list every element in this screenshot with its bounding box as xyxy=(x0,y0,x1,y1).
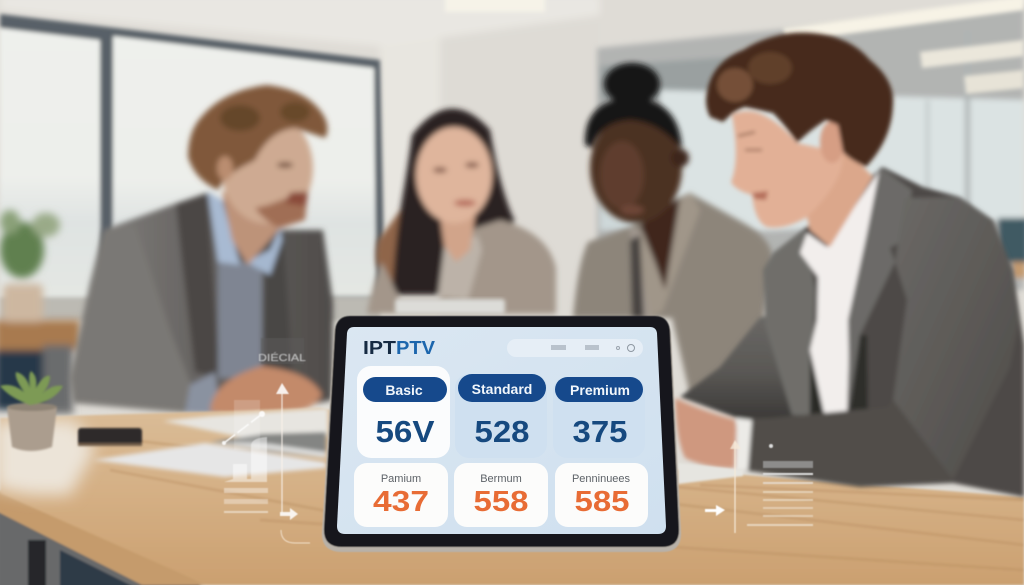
tablet body xyxy=(322,316,681,552)
table lines xyxy=(747,444,813,526)
price card 3 xyxy=(555,463,648,527)
column: standard xyxy=(455,374,547,458)
column: standard: 528 xyxy=(474,414,530,449)
person: woman with bun xyxy=(573,63,772,395)
price card 3: 585 xyxy=(574,486,630,518)
person: man on the left xyxy=(70,85,333,418)
logo xyxy=(363,338,435,358)
right windows xyxy=(597,5,1024,290)
badge xyxy=(258,338,307,364)
small tablet held behind xyxy=(395,299,505,314)
ceiling lights xyxy=(445,0,1024,94)
logo: IPT xyxy=(363,338,396,358)
price card 1 xyxy=(354,463,448,527)
overlay: left data graphic xyxy=(222,338,310,543)
price card 2: Bermum xyxy=(480,473,522,485)
white paper under right hand xyxy=(678,463,743,484)
column: premium xyxy=(553,377,645,458)
column: basic: Basic xyxy=(385,382,423,398)
overlay: right data graphic xyxy=(705,440,813,533)
table light reflection xyxy=(0,420,95,495)
phone on table xyxy=(78,428,142,446)
vertical arrow xyxy=(276,383,310,543)
price card 2 xyxy=(454,463,548,527)
column: standard: Standard xyxy=(472,381,532,397)
column: premium: 375 xyxy=(572,414,628,449)
price card 1: Pamium xyxy=(381,473,421,485)
tablet screen xyxy=(337,327,666,534)
table top xyxy=(0,408,1024,585)
bar chart and trend xyxy=(222,400,268,513)
top search bar xyxy=(507,339,643,357)
badge: DIÉCIAL xyxy=(258,351,307,364)
potted plant on table xyxy=(0,371,63,451)
person: man on the right xyxy=(675,33,1024,497)
column: basic: 56V xyxy=(376,414,435,449)
column: basic xyxy=(357,366,450,458)
person: woman at centre xyxy=(367,109,556,314)
column: premium: Premium xyxy=(570,382,630,398)
left windows xyxy=(0,14,385,321)
price card 2: 558 xyxy=(474,486,528,518)
tablet xyxy=(322,316,681,552)
arrows xyxy=(705,440,741,533)
papers and closed laptop on table xyxy=(93,408,328,477)
logo: PTV xyxy=(396,338,435,358)
price card 3: Penninuees xyxy=(572,473,631,485)
price card 1: 437 xyxy=(373,486,429,518)
background plant and side table xyxy=(0,210,80,415)
